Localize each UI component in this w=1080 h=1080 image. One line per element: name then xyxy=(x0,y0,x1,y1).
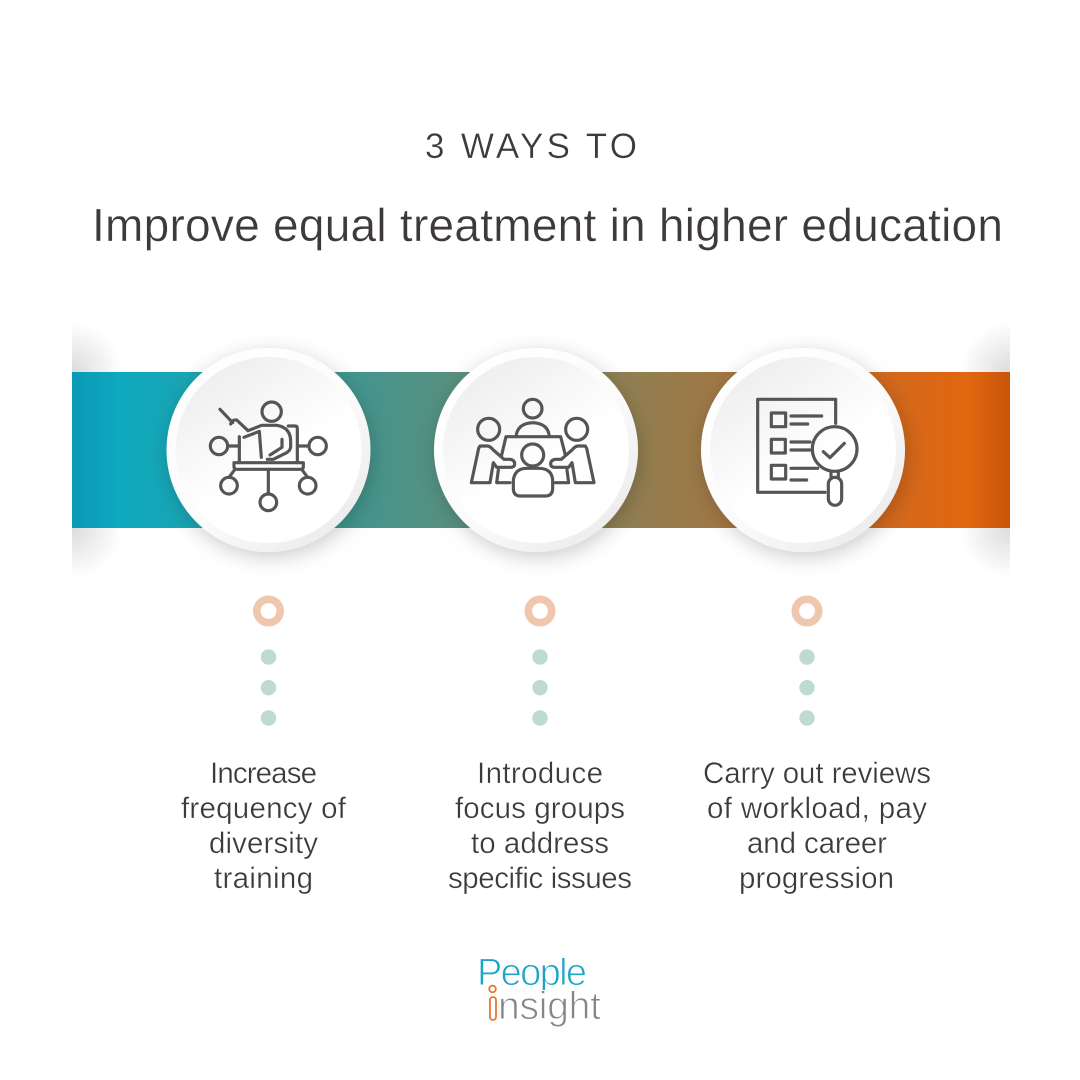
text: way 1 xyxy=(181,757,347,895)
title: Improve equal treatment in higher education xyxy=(92,199,1003,251)
gradient band with edge shadows xyxy=(72,320,1010,580)
text: way 2: specific issues xyxy=(448,862,632,895)
text: way 3: and career xyxy=(747,827,887,860)
badge 2: focus group icon xyxy=(434,348,638,552)
connector dots 3 xyxy=(795,599,819,726)
icon: checklist with magnifying glass xyxy=(758,399,857,505)
text: way 2: focus groups xyxy=(455,792,625,825)
logo: People Insight: nsight xyxy=(498,985,601,1028)
subtitle: 3 ways to: 3 WAYS TO xyxy=(425,127,637,166)
icon: presenter on laptop with network nodes xyxy=(210,402,326,511)
connector dots 2 xyxy=(528,599,552,726)
text: way 3: progression xyxy=(739,862,894,895)
text: way 1: diversity xyxy=(209,827,318,860)
text: way 2: to address xyxy=(471,827,609,860)
connector dots 1 xyxy=(257,599,280,726)
text: way 3 xyxy=(703,757,931,895)
text: way 3: of workload, pay xyxy=(707,792,927,825)
logo: People Insight xyxy=(477,952,601,1028)
text: way 2: Introduce xyxy=(477,757,603,790)
badge 3: checklist review icon xyxy=(701,348,905,552)
text: way 1: training xyxy=(214,862,313,895)
text: way 3: Carry out reviews xyxy=(703,757,931,790)
text: way 2 xyxy=(448,757,632,895)
badge 1: training icon xyxy=(166,348,370,552)
logo: People Insight: People xyxy=(477,952,587,994)
icon: people around a table xyxy=(471,399,594,496)
text: way 1: Increase xyxy=(210,757,317,790)
text: way 1: frequency of xyxy=(181,792,347,825)
